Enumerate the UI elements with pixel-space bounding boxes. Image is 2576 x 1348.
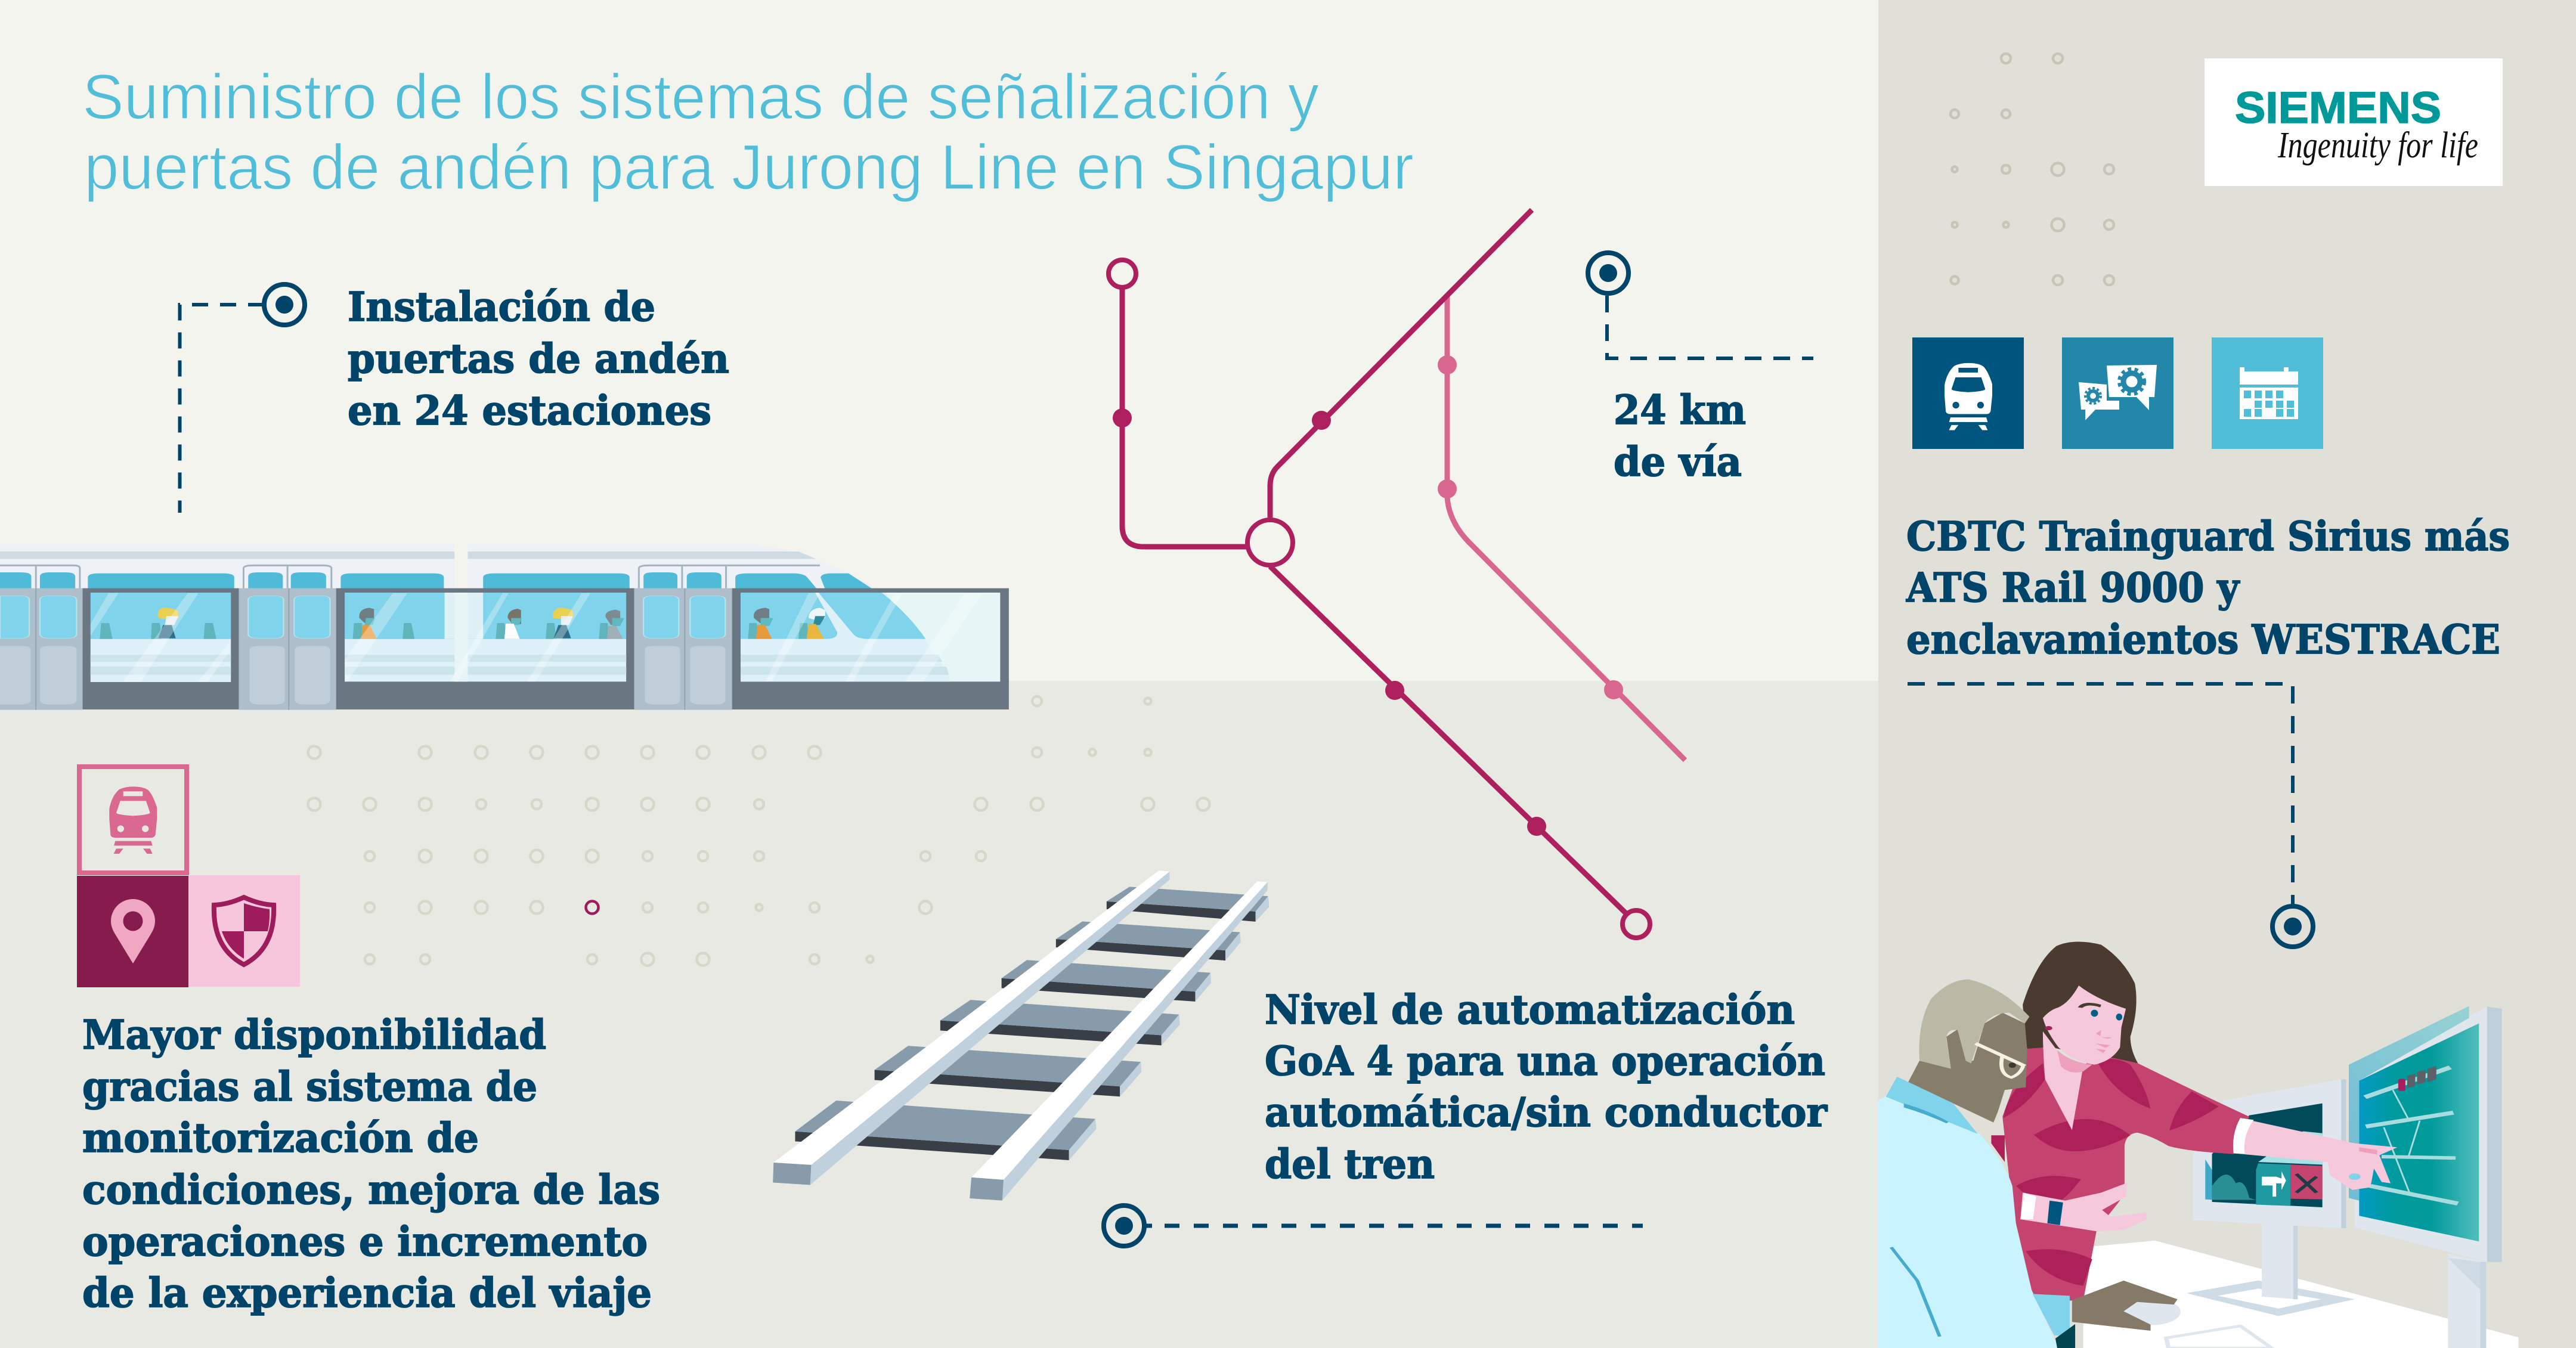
interchange station [1247, 520, 1293, 565]
passengers [100, 608, 825, 639]
train body [0, 544, 885, 709]
woman's pointing arm [2235, 1120, 2397, 1190]
text: CBTC Trainguard: ATS Rail 9000 y [1906, 564, 2240, 611]
woman [1991, 942, 2397, 1300]
logo: siemens: SIEMENS [2235, 83, 2441, 132]
woman's other arm [2020, 1183, 2147, 1231]
desk [2083, 1241, 2518, 1348]
text: mayor disponibilidad: gracias al sistema de [82, 1063, 537, 1110]
icon: shield tile [188, 875, 300, 987]
magenta line [1122, 210, 1628, 915]
title: puertas de andén para Jurong Line en Singapur [84, 131, 1414, 203]
text: mayor disponibilidad: de la experiencia del viaje [82, 1269, 652, 1316]
upper windows [0, 572, 873, 589]
glass panels [82, 588, 239, 709]
text: nivel de automatizacion: del tren [1265, 1141, 1435, 1188]
illustration: railway track [773, 870, 1269, 1201]
text: CBTC Trainguard: enclavamientos WESTRACE [1906, 616, 2500, 663]
illustration: operators at monitors [1878, 942, 2518, 1348]
text: 24 km de via: 24 km [1614, 386, 1746, 433]
icon: train tile [1912, 337, 2024, 449]
callout: target and dashed line, control room [1908, 684, 2313, 947]
line map [1109, 210, 1685, 938]
text: mayor disponibilidad: condiciones, mejora de las [82, 1166, 660, 1213]
text: instalacion de puertas [348, 283, 729, 434]
text: 24 km de via [1614, 386, 1746, 485]
callout: target and dashed line, platform doors [180, 284, 305, 513]
title: Suministro de los sistemas de señalización y [82, 61, 1319, 132]
icon: train outline tile [79, 767, 187, 873]
text: nivel de automatizacion [1265, 986, 1828, 1188]
icon group: train, location, shield [77, 767, 300, 987]
callout: target and dashed line, 24 km [1588, 253, 1813, 358]
text: instalacion de puertas: puertas de andén [348, 335, 729, 382]
text: mayor disponibilidad [82, 1011, 660, 1316]
icon: location pin tile [77, 876, 188, 987]
text: CBTC Trainguard [1906, 513, 2510, 663]
right rail [970, 881, 1268, 1201]
left monitor [2187, 1079, 2355, 1316]
text: mayor disponibilidad: monitorización de [82, 1114, 479, 1161]
doors [0, 588, 732, 710]
left rail [773, 870, 1169, 1185]
train with platform screen doors [0, 544, 1009, 710]
text: 24 km de via: de vía [1614, 438, 1742, 485]
logo: siemens [2205, 58, 2503, 186]
dot pattern: lower middle [308, 696, 1209, 966]
pink branch [1447, 296, 1685, 760]
icon: calendar tile [2212, 337, 2323, 449]
mouse [2122, 1299, 2181, 1325]
logo: siemens: Ingenuity for life [2277, 125, 2478, 166]
text: nivel de automatizacion: Nivel de automatización [1265, 986, 1795, 1033]
callout: target and dashed line, automation [1104, 1206, 1643, 1246]
text: nivel de automatizacion: GoA 4 para una operación [1265, 1037, 1825, 1084]
text: CBTC Trainguard: CBTC Trainguard Sirius más [1906, 513, 2510, 560]
text: instalacion de puertas: en 24 estaciones [348, 387, 711, 434]
text: instalacion de puertas: Instalación de [348, 283, 655, 330]
icon: speech bubbles with gears tile [2062, 337, 2174, 449]
open station: top [1109, 260, 1136, 287]
sleepers [795, 887, 1269, 1160]
title [82, 61, 1414, 203]
dot pattern: top right [1950, 54, 2114, 285]
open station: bottom [1623, 910, 1650, 938]
text: mayor disponibilidad: operaciones e incremento [82, 1218, 648, 1265]
right monitor [2349, 1006, 2502, 1348]
glass reflections [91, 593, 982, 681]
text: mayor disponibilidad: Mayor disponibilidad [82, 1011, 546, 1058]
text: nivel de automatizacion: automática/sin conductor [1265, 1089, 1828, 1136]
man [1878, 980, 2178, 1348]
